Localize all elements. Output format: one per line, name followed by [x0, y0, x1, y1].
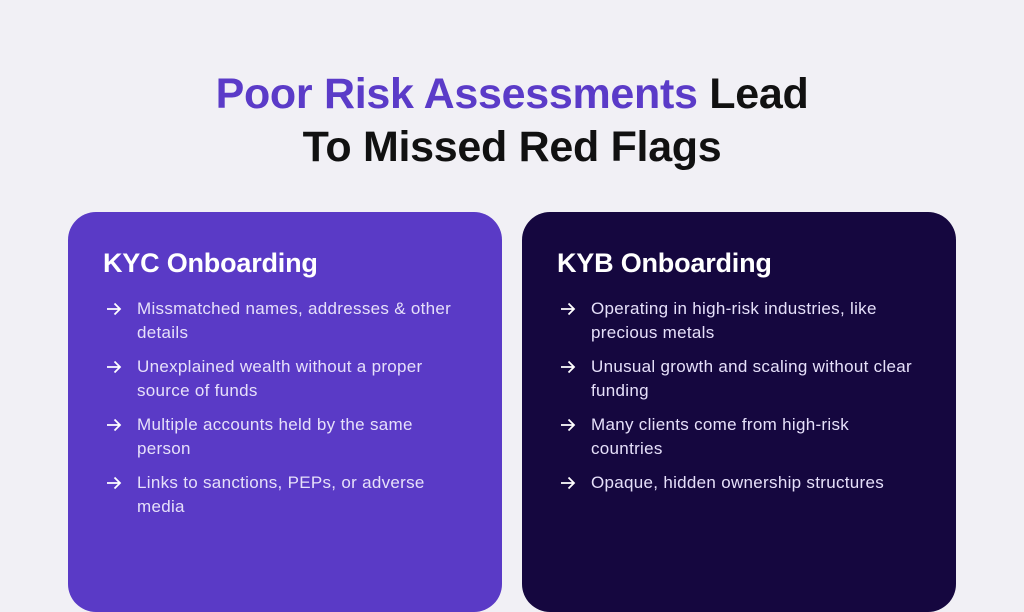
panel: KYC onboarding: person [137, 439, 191, 458]
panel: KYC onboarding: Links to sanctions, PEPs, or adverse [137, 473, 425, 492]
panel: KYB onboarding: Opaque, hidden ownership structures [591, 473, 884, 492]
bullet 2 [107, 357, 423, 400]
panel: KYC onboarding: Unexplained wealth without a proper [137, 357, 423, 376]
panel: KYC onboarding: Missmatched names, addresses & other [137, 299, 451, 318]
bullet 2 [561, 357, 912, 400]
panel: KYB onboarding: countries [591, 439, 663, 458]
bullet 4 [561, 473, 884, 492]
panel: KYB onboarding: funding [591, 381, 649, 400]
heading: KYB: KYB Onboarding [557, 248, 772, 278]
panel: KYC onboarding [68, 212, 502, 612]
bullet 1 [561, 299, 877, 342]
panel: KYC onboarding: details [137, 323, 188, 342]
title: To Missed Red Flags [303, 123, 721, 171]
bullet 4 [107, 473, 425, 516]
title: Poor Risk Assessments Lead [216, 70, 808, 118]
title [216, 70, 808, 171]
panel: KYB onboarding: Many clients come from high-risk [591, 415, 849, 434]
heading: KYC: KYC Onboarding [103, 248, 318, 278]
panel: KYB onboarding: precious metals [591, 323, 715, 342]
panel: KYB onboarding: Unusual growth and scaling without clear [591, 357, 912, 376]
panel: KYC onboarding: media [137, 497, 185, 516]
panel: KYB onboarding: Operating in high-risk industries, like [591, 299, 877, 318]
bullet 3 [107, 415, 413, 458]
panel: KYC onboarding: Multiple accounts held by the same [137, 415, 413, 434]
panel: KYB onboarding [522, 212, 956, 612]
bullet 3 [561, 415, 849, 458]
bullet 1 [107, 299, 451, 342]
panel: KYC onboarding: source of funds [137, 381, 258, 400]
